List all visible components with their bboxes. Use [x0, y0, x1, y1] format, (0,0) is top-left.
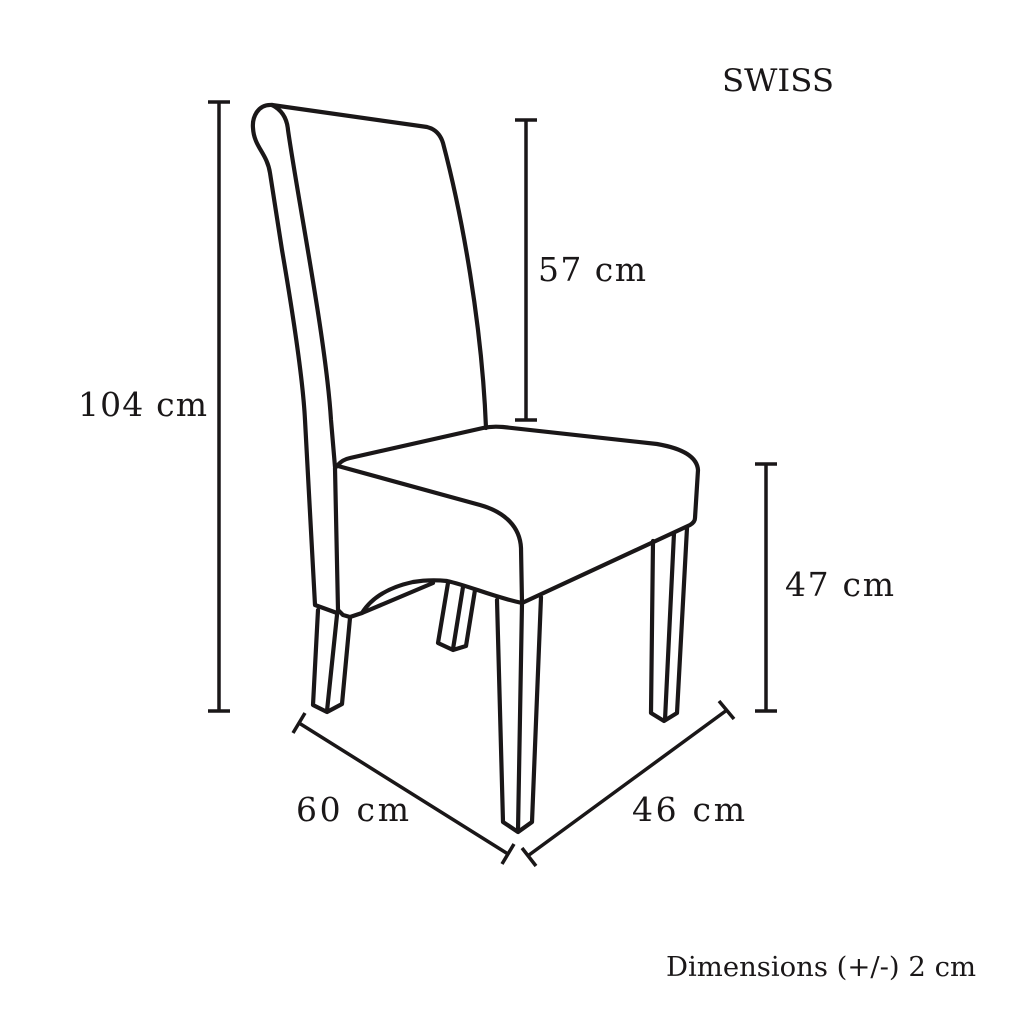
chair seat top [336, 427, 698, 603]
rear left leg [313, 610, 350, 712]
chair backrest [272, 105, 486, 428]
chair seat front [338, 466, 522, 603]
footnote: Dimensions (+/-) 2 cm [666, 952, 976, 983]
front leg [497, 597, 541, 832]
chair illustration [253, 105, 698, 832]
dimension: depth 46 cm [522, 701, 745, 866]
dimension: total height 104 cm [78, 102, 230, 711]
dimension: seat height 47 cm [755, 464, 894, 711]
chair inner back edge [272, 105, 335, 467]
under-seat rail [362, 583, 433, 613]
dimension: backrest 57 cm: 57 cm [538, 250, 646, 289]
dimension: seat height 47 cm: 47 cm [785, 565, 894, 604]
dimension: width 60 cm: 60 cm [296, 790, 409, 829]
dimension: total height 104 cm: 104 cm [78, 385, 207, 424]
chair roll side [253, 105, 337, 613]
right leg [651, 528, 687, 721]
dimension: width 60 cm [293, 713, 514, 864]
title: SWISS [722, 63, 834, 99]
dimension: backrest 57 cm [515, 120, 646, 420]
chair seat side [335, 468, 522, 617]
rear inner leg [438, 583, 475, 650]
dimension: depth 46 cm: 46 cm [632, 790, 745, 829]
